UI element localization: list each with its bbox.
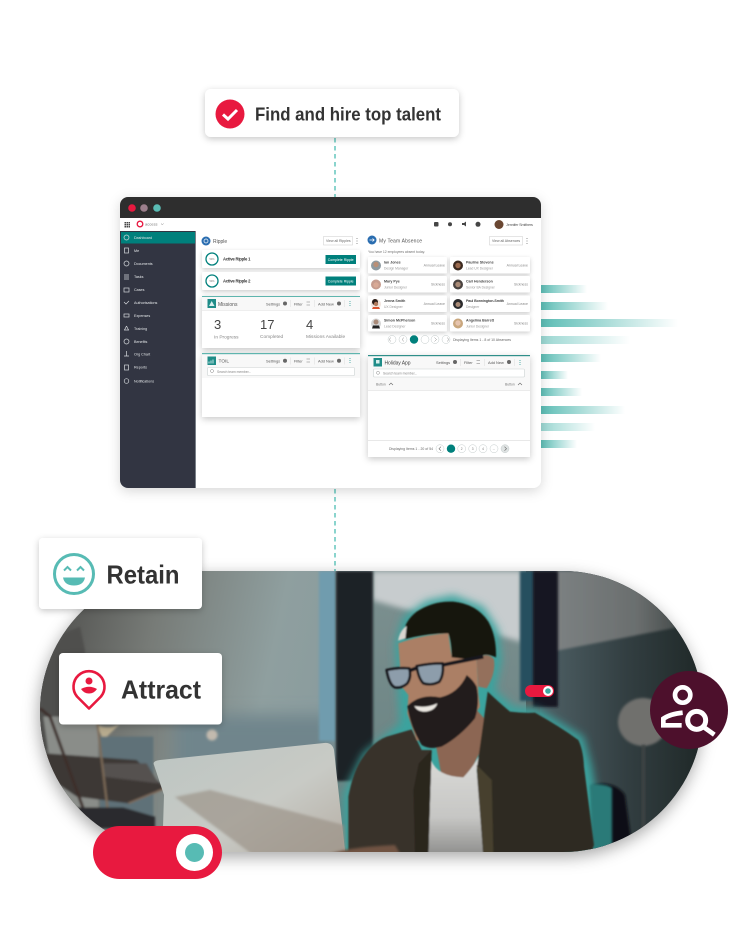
sidebar: Org Chart: [134, 352, 150, 356]
section: ripple heading: View all Ripples: [326, 239, 351, 243]
stat: in progress: In Progress: [214, 334, 239, 340]
holiday pagination: 4: [482, 447, 484, 451]
absence: Angelina Barrett: Junior Designer: [466, 324, 490, 328]
stat: missions available: Missions Available: [306, 334, 345, 340]
absence: Mary Pye: Junior Designer: [384, 286, 408, 290]
section: my team absence heading: View all Absences: [492, 239, 520, 243]
app header: [124, 220, 533, 229]
absence: Pauline Stevens: Lead UX Designer: [466, 266, 494, 270]
panel: holiday app: Add New: [488, 360, 504, 365]
teal gradient speed bars: [540, 285, 678, 448]
absence cards: [368, 257, 530, 332]
absence: Angelina Barrett: Sickness: [514, 322, 528, 326]
sidebar: Notifications: [134, 380, 154, 384]
icon: red check: [216, 100, 244, 128]
absence: Jenna Smith: [368, 296, 447, 312]
icon: person search badge: [650, 671, 728, 749]
stat: completed: 17: [260, 317, 274, 332]
section: my team absence heading: [368, 236, 527, 254]
dashed connector: app window to photo: [334, 489, 336, 572]
absence: Mary Pye: [368, 276, 447, 292]
section: my team absence heading: You have 12 employees absent today.: [368, 250, 425, 254]
panel: missions: Missions: [218, 302, 238, 308]
photo background: [40, 571, 710, 856]
photo: man: [348, 602, 594, 857]
face: [398, 633, 480, 747]
panel: holiday app: Button: [505, 382, 515, 386]
stat: completed: Completed: [260, 334, 284, 340]
panel: TOIL: Settings: [266, 358, 280, 364]
absence: Simon McPherson: [368, 315, 447, 332]
panel: holiday app: [368, 355, 530, 457]
photo: wall panel, chair and shelves: [40, 627, 165, 830]
panel: missions: Settings: [266, 302, 280, 306]
retain label: Retain: [106, 560, 180, 590]
absence: Pauline Stevens: Annual Leave: [507, 264, 528, 268]
sidebar: Me: [134, 249, 139, 253]
stat: missions available: 4: [306, 317, 313, 332]
section: my team absence heading: My Team Absence: [379, 238, 422, 244]
panel: holiday app: Search team member...: [383, 372, 417, 376]
absence pagination: Displaying Items 1 - 8 of 10 Absences: [453, 338, 511, 342]
attract label: Attract: [121, 674, 201, 704]
hair: [404, 602, 496, 660]
section: ripple heading: Ripple: [213, 239, 227, 245]
card: active ripple 2: Active Ripple 2: [223, 278, 251, 284]
absence: Jenna Smith: UX Designer: [384, 305, 404, 309]
callout: find and hire top talent: [205, 89, 459, 137]
absence: Jenna Smith: Annual Leave: [424, 302, 445, 306]
icon: smiling face: [54, 554, 94, 594]
absence: Carl Henderson: Senior BA Designer: [466, 286, 496, 290]
t-shirt: [427, 756, 484, 852]
panel: missions: [202, 296, 360, 348]
absence: Jenna Smith: Jenna Smith: [384, 299, 405, 303]
absence: Mary Pye: Mary Pye: [384, 280, 400, 284]
card: active ripple 1: 50%: [209, 258, 215, 261]
absence: Paul Bonnington-Smith: [450, 296, 530, 312]
callout: retain: [39, 538, 202, 609]
sidebar: Reports: [134, 366, 147, 370]
holiday pagination: ...: [493, 447, 495, 451]
neck: [435, 710, 485, 778]
holiday pagination: [389, 444, 509, 453]
ear: [477, 655, 494, 688]
beard: [407, 675, 478, 748]
absence: Pauline Stevens: [450, 257, 530, 274]
absence: Ian Jones: Annual Leave: [424, 264, 445, 268]
sidebar: [120, 231, 196, 488]
teeth: [414, 703, 437, 712]
sidebar: Tasks: [134, 275, 144, 279]
jacket: [348, 692, 594, 857]
absence: Carl Henderson: Sickness: [514, 282, 528, 286]
stat: in progress: [214, 317, 239, 340]
photo: chair teal tint: [590, 784, 612, 852]
absence: Ian Jones: Ian Jones: [384, 260, 401, 264]
holiday pagination: 3: [472, 447, 474, 451]
absence pagination: [388, 335, 511, 344]
stat: completed: [260, 317, 284, 340]
sidebar: Benefits: [134, 340, 147, 344]
card: active ripple 2: Complete Ripple: [328, 279, 354, 283]
absence: Mary Pye: Sickness: [431, 282, 445, 286]
card: active ripple 2: 50%: [209, 280, 215, 283]
absence: Pauline Stevens: Pauline Stevens: [466, 260, 494, 264]
sidebar: Expenses: [134, 314, 150, 318]
panel: TOIL: Search team member...: [217, 370, 251, 374]
sidebar: Dashboard: [134, 236, 152, 240]
panel: TOIL: TOIL: [218, 358, 229, 364]
panel: missions: Filter: [294, 302, 303, 306]
section: ripple heading: [202, 236, 357, 246]
absence: Ian Jones: Design Manager: [384, 266, 409, 270]
card: active ripple 2: [202, 272, 360, 290]
card: active ripple 1: Active Ripple 1: [223, 256, 251, 262]
panel: TOIL: [202, 353, 360, 417]
panel: holiday app: Settings: [436, 360, 450, 365]
absence: Carl Henderson: [450, 276, 530, 292]
stat: missions available: [306, 317, 345, 340]
panel: holiday app: Button: [376, 382, 386, 386]
stat: in progress: 3: [214, 317, 221, 332]
app header: Jennifer Smithers: [506, 222, 533, 227]
large toggle switch: [93, 826, 222, 879]
dashed connector: top card to app window: [334, 138, 336, 197]
absence: Simon McPherson: Lead Designer: [384, 324, 406, 328]
panel: holiday app: Filter: [464, 360, 473, 365]
holiday pagination: Displaying Items 1 - 20 of 54: [389, 447, 433, 451]
sidebar: Documents: [134, 262, 153, 266]
app header: access: [145, 222, 157, 226]
icon: location pin with person: [74, 671, 104, 708]
callout text: Find and hire top talent: [255, 104, 441, 124]
title bar: [120, 197, 541, 218]
infographic canvas: [29, 88, 728, 879]
callout: attract: [59, 653, 222, 724]
absence: Ian Jones: [368, 257, 447, 274]
small toggle on photo: [525, 685, 554, 697]
panel: app window: [120, 197, 541, 488]
sidebar: Authorisations: [134, 301, 158, 305]
photo pill: man smiling at laptop: [40, 571, 710, 862]
holiday pagination: 2: [461, 447, 463, 451]
glasses: [387, 657, 483, 687]
absence: Simon McPherson: Simon McPherson: [384, 318, 415, 322]
absence: Paul Bonnington-Smith: Designer: [466, 305, 480, 309]
sidebar: Training: [134, 327, 147, 331]
absence: Angelina Barrett: Angelina Barrett: [466, 318, 495, 322]
panel: holiday app: Holiday App: [384, 360, 411, 366]
absence: Carl Henderson: Carl Henderson: [466, 280, 493, 284]
sidebar: Cases: [134, 288, 145, 292]
photo: teal glow around man: [343, 595, 607, 857]
panel: TOIL: Add New: [318, 358, 334, 364]
card: active ripple 1: [202, 250, 360, 268]
absence: Paul Bonnington-Smith: Annual Leave: [507, 302, 528, 306]
absence: Paul Bonnington-Smith: Paul Bonnington-Smith: [466, 299, 504, 303]
panel: TOIL: Filter: [294, 358, 303, 364]
card: active ripple 1: Complete Ripple: [328, 258, 354, 262]
absence: Simon McPherson: Sickness: [431, 322, 445, 326]
photo: laptop: [154, 743, 405, 862]
absence: Angelina Barrett: [450, 315, 530, 332]
panel: missions: Add New: [318, 302, 334, 306]
